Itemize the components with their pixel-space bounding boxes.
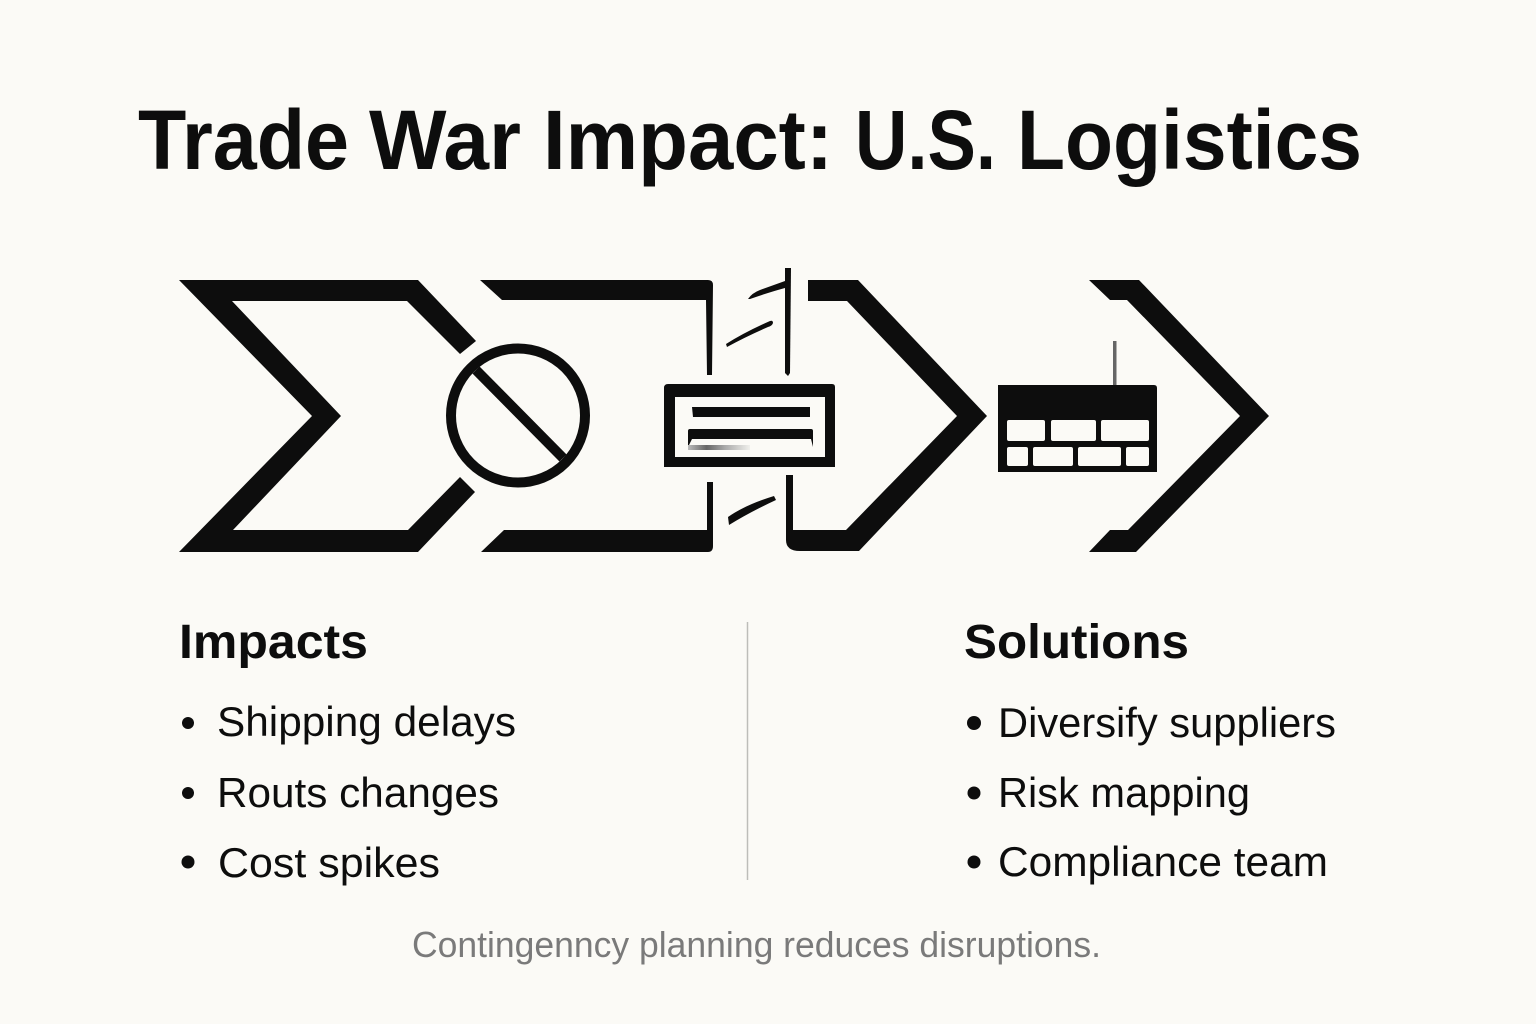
- panel: impacts: [179, 616, 516, 886]
- arrow: third chevron: [1089, 280, 1269, 552]
- footer note: Contingenncy planning reduces disruptions.: [412, 924, 1101, 965]
- list: solutions items: [967, 699, 1336, 885]
- list: impacts items: Routs changes: [217, 769, 499, 816]
- icon: brick wall keyboard: [998, 341, 1157, 472]
- arrow: second chevron right side: [786, 280, 987, 551]
- title: War: [369, 93, 521, 187]
- list: solutions items: Compliance team: [998, 838, 1328, 885]
- arrow: second chevron left bracket: [480, 280, 713, 552]
- title: Impact:: [543, 93, 833, 187]
- panel: solutions: [964, 616, 1336, 885]
- list: solutions items: Risk mapping: [998, 769, 1250, 816]
- heading: solutions: Solutions: [964, 616, 1189, 669]
- diagram: supply chain flow: [179, 268, 1269, 552]
- list: impacts items: Cost spikes: [218, 839, 440, 886]
- list: impacts items: [182, 698, 516, 886]
- title: Trade: [138, 93, 349, 187]
- list: solutions items: Diversify suppliers: [998, 699, 1336, 746]
- icon: prohibition sign: [451, 348, 585, 482]
- panel divider: [746, 622, 748, 880]
- title: Logistics: [1017, 93, 1362, 187]
- icon: broken barrier strokes: [726, 268, 791, 525]
- list: impacts items: Shipping delays: [217, 698, 516, 745]
- icon: customs document box: [664, 384, 835, 467]
- heading: impacts: Impacts: [179, 616, 368, 669]
- arrow: first chevron: [179, 280, 476, 552]
- title: U.S.: [855, 93, 996, 187]
